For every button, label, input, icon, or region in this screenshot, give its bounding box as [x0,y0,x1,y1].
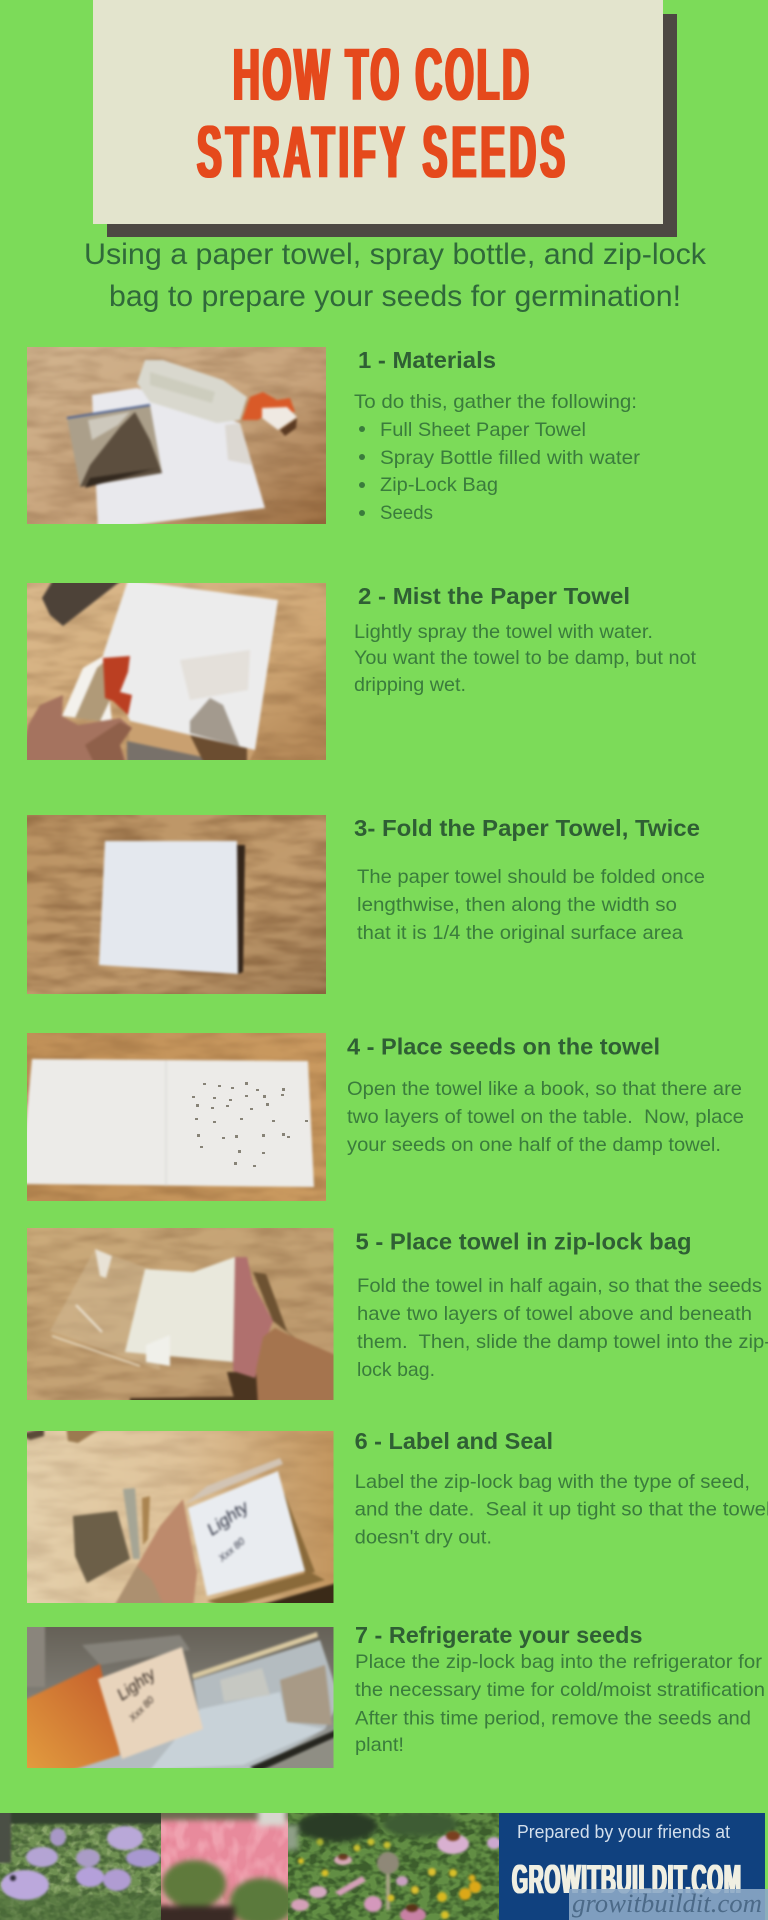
photo: folded towel [27,815,326,994]
icon: handwritten bag label [113,1664,160,1725]
photo: pink muhly grass [161,1813,288,1920]
title block [93,0,677,237]
subtitle [84,238,706,313]
panel: step 6 label and seal [15,1420,768,1615]
title: how to cold stratify seeds: STRATIFY SEEDS [197,112,565,194]
photo: misting the towel [27,583,326,760]
photo: materials on wood table [27,347,326,524]
panel: step 5 towel in bag [15,1215,768,1410]
heading: 7 refrigerate your seeds: 7 - Refrigerate your seeds [355,1622,642,1648]
panel: step 7 refrigerate [15,1615,765,1780]
text: seed placement instructions [347,1078,744,1156]
title: how to cold stratify seeds: HOW TO COLD [233,34,529,116]
text: fold instructions: that it is 1/4 the original surface area [357,922,683,944]
text: seed placement instructions: two layers of towel on the table. Now, place [347,1106,744,1128]
text: growitbuildit.com logo: GROWITBUILDIT.COM [512,1856,741,1902]
photo: towel and zip-lock bag in hand [27,1228,334,1400]
text: refrigeration instructions: the necessary time for cold/moist stratification [355,1679,765,1701]
text: materials list [354,391,641,524]
icon: handwritten bag label: Lighty [113,1664,160,1704]
photo: coneflower meadow [288,1813,499,1920]
text: labelling instructions [355,1471,768,1549]
heading: 4 place seeds on the towel: 4 - Place seeds on the towel [347,1034,660,1060]
text: refrigeration instructions: After this time period, remove the seeds and [355,1708,751,1730]
text: seed placement instructions: Open the towel like a book, so that there are [347,1078,742,1100]
text: bagging instructions: lock bag. [357,1359,435,1381]
watermark: growitbuildit.com [572,1889,762,1918]
text: materials list: To do this, gather the following: [354,391,637,413]
title: how to cold stratify seeds [197,34,565,194]
panel: step 2 mist [15,570,697,770]
text: labelling instructions: doesn't dry out. [355,1527,492,1549]
text: bagging instructions: Fold the towel in half again, so that the seeds [357,1275,762,1297]
text: bagging instructions: them. Then, slide the damp towel into the zip- [357,1331,768,1353]
text: fold instructions: lengthwise, then along the width so [357,894,677,916]
photo: bee balm flowers [0,1813,161,1920]
text: refrigeration instructions: plant! [355,1734,404,1756]
text: refrigeration instructions [355,1651,765,1756]
panel: step 3 fold [15,805,705,1005]
subtitle: bag to prepare your seeds for germination! [109,280,681,313]
panel: step 1 materials [15,335,641,535]
text: materials list: Full Sheet Paper Towel [380,419,586,441]
heading: 1 materials: 1 - Materials [358,347,496,373]
text: mist instructions: dripping wet. [354,674,466,696]
text: labelling instructions: and the date. Seal it up tight so that the towel [355,1498,768,1520]
text: seed placement instructions: your seeds on one half of the damp towel. [347,1134,721,1156]
icon: handwritten bag label: Xxx 80 [216,1536,248,1565]
heading: 6 label and seal: 6 - Label and Seal [355,1428,553,1454]
text: bagging instructions [357,1275,768,1381]
text: bagging instructions: have two layers of towel above and beneath [357,1303,752,1325]
icon: handwritten bag label: Xxx 80 [127,1694,157,1725]
panel: brand credit [499,1813,765,1920]
photo: labelled zip-lock bag [27,1431,334,1603]
title shadow [107,14,677,237]
photo: bag in refrigerator [27,1627,334,1768]
text: mist instructions: You want the towel to be damp, but not [354,647,697,669]
title panel [93,0,663,224]
text: fold instructions [357,866,705,944]
text: labelling instructions: Label the zip-lock bag with the type of seed, [355,1471,750,1493]
icon: handwritten bag label: Lighty [203,1496,253,1539]
text: mist instructions [354,621,697,696]
heading: 3 fold the paper towel twice: 3- Fold the Paper Towel, Twice [354,815,700,841]
footer [0,1800,768,1920]
text: fold instructions: The paper towel should be folded once [357,866,705,888]
text: materials list: Zip-Lock Bag [380,474,498,496]
heading: 5 place towel in zip-lock bag: 5 - Place towel in zip-lock bag [356,1228,692,1254]
text: refrigeration instructions: Place the zip-lock bag into the refrigerator for [355,1651,763,1673]
heading: 2 mist the paper towel: 2 - Mist the Paper Towel [358,583,630,609]
text: mist instructions: Lightly spray the towel with water. [354,621,653,643]
text: prepared by your friends at: Prepared by your friends at [517,1821,730,1842]
icon: handwritten bag label [203,1496,253,1565]
text: materials list: Spray Bottle filled with water [380,447,641,469]
panel: step 4 seeds on towel [15,1020,744,1215]
text: materials list: Seeds [380,502,433,524]
subtitle: Using a paper towel, spray bottle, and zip-lock [84,238,706,271]
photo: seeds on opened towel [27,1033,326,1201]
